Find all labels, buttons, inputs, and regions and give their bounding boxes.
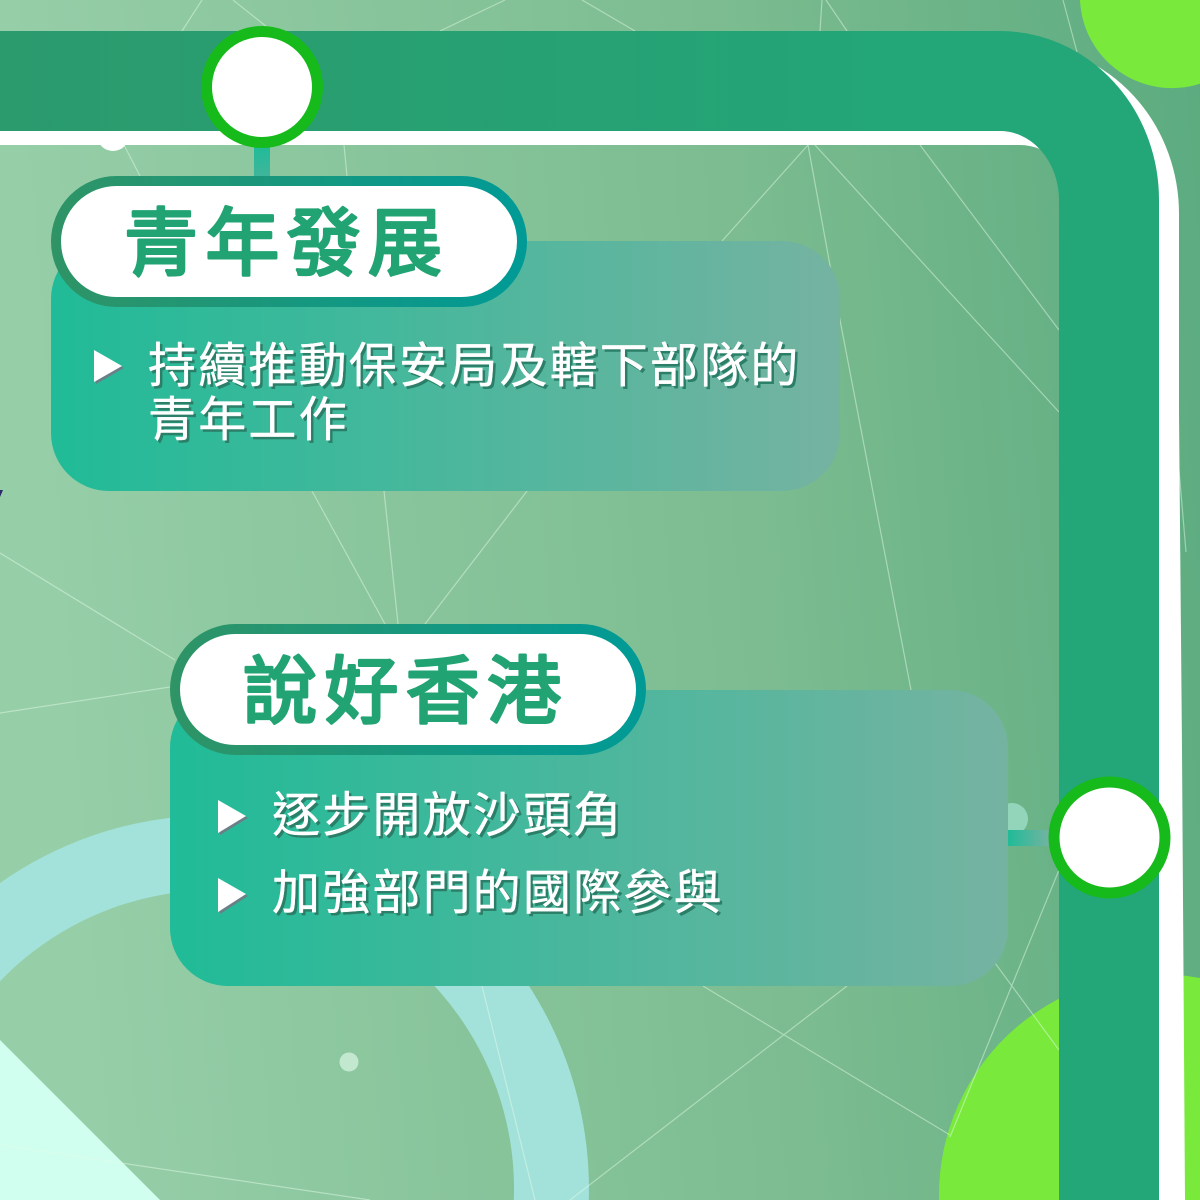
bullet text: 持續推動保安局及轄下部隊的 [148,326,801,396]
connector: panel to right station [1008,830,1052,846]
bullet arrow 2 [218,878,248,914]
decorative green circle bottom right [939,974,1200,1200]
bullet text: 青年工作 [148,380,349,450]
heading pill [56,181,522,302]
panel: youth development [51,181,840,491]
station marker top [206,32,318,142]
heading pill [175,629,641,750]
bullet text 1: 逐步開放沙頭角 [272,776,623,846]
bullet arrow [94,350,124,384]
bullet text: 持續推動保安局及轄下部隊的 [150,328,803,398]
bullet text [148,326,803,452]
bullet text 1: 逐步開放沙頭角 [274,778,626,848]
bullet arrow 1 [218,800,248,835]
decorative green circle top right [1080,0,1200,88]
dark speck at left edge [0,490,3,497]
bullet text: 青年工作 [150,382,351,452]
connector: top station to panel [254,145,270,180]
heading: 青年發展 [124,184,442,291]
panel background [170,690,1008,986]
decorative dots [97,119,1028,1072]
panel: telling Hong Kong's story [170,629,1008,986]
decorative corner triangle [0,1040,160,1200]
decorative ring [0,815,589,1200]
station marker right [1054,782,1165,893]
bullet text 2: 加強部門的國際參與 [274,856,726,926]
heading: 說好香港 [243,632,561,739]
panel background [51,241,840,491]
bullet text 2: 加強部門的國際參與 [272,853,724,923]
